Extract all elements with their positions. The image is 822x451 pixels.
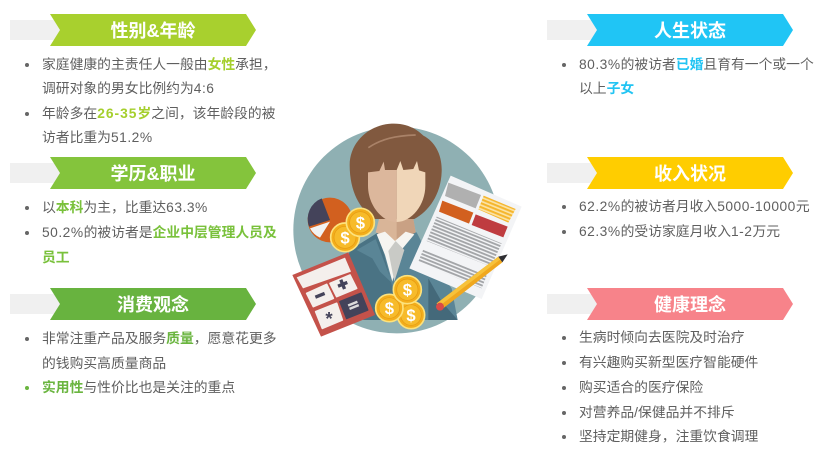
figure: neck and suit bbox=[344, 219, 458, 320]
icon: coins upper: $ bbox=[340, 228, 350, 247]
banner: health concepts: 健康理念 bbox=[654, 295, 726, 315]
banner: consumption attitudes bbox=[10, 288, 256, 320]
bullet text: marriage and children: 以上子女 bbox=[579, 81, 634, 96]
bullet text: responsibility: 家庭健康的主责任人一般由女性承担， bbox=[42, 57, 277, 72]
banner: gender and age: 性别&年龄 bbox=[110, 21, 196, 41]
banner: education and occupation bbox=[10, 157, 256, 189]
background circle bbox=[293, 127, 500, 333]
bullet text: job level: 员工 bbox=[42, 250, 70, 265]
bullet text: quality bbox=[25, 331, 277, 371]
bullet text: marriage and children: 80.3%的被访者已婚且育有一个或一个 bbox=[579, 57, 814, 72]
icon: coins lower: $ bbox=[403, 281, 413, 300]
banner: income status: 收入状况 bbox=[654, 164, 726, 184]
bullet text: fitness: 坚持定期健身，注重饮食调理 bbox=[579, 429, 758, 444]
bullet text: degree: 以本科为主，比重达63.3% bbox=[42, 200, 208, 215]
icon: calculator bbox=[292, 252, 375, 337]
bullet text: age range: 访者比重为51.2% bbox=[42, 130, 153, 145]
panel: gender and age bbox=[10, 14, 277, 145]
panel: education and occupation bbox=[10, 157, 277, 265]
panel: income status bbox=[547, 157, 810, 239]
banner: education and occupation: 学历&职业 bbox=[110, 164, 196, 184]
panel: consumption attitudes bbox=[10, 288, 277, 395]
bullet text: responsibility bbox=[25, 57, 277, 96]
bullet text: job level bbox=[25, 225, 277, 265]
banner: life status: 人生状态 bbox=[654, 21, 726, 41]
figure: hair bbox=[350, 124, 442, 219]
icon: coins lower bbox=[376, 276, 425, 329]
icon: report document bbox=[409, 176, 522, 299]
bullet text: insurance: 购买适合的医疗保险 bbox=[579, 380, 703, 395]
bullet text: age range bbox=[25, 106, 275, 145]
bullet text: quality: 非常注重产品及服务质量，愿意花更多 bbox=[42, 331, 277, 346]
panel: life status bbox=[547, 14, 814, 96]
icon: pencil bbox=[436, 254, 508, 311]
banner: income status bbox=[547, 157, 793, 189]
banner: gender and age bbox=[10, 14, 256, 46]
bullet text: household income: 62.3%的受访家庭月收入1-2万元 bbox=[579, 224, 780, 239]
banner: consumption attitudes: 消费观念 bbox=[117, 295, 189, 315]
bullet text: age range: 年龄多在26-35岁之间，该年龄段的被 bbox=[42, 106, 275, 121]
banner: health concepts bbox=[547, 288, 793, 320]
icon: coins lower: $ bbox=[385, 299, 395, 318]
icon: coins upper bbox=[331, 208, 374, 252]
icon: coins upper: $ bbox=[356, 213, 366, 232]
bullet text: responsibility: 调研对象的男女比例约为4:6 bbox=[42, 81, 214, 96]
figure: face bbox=[368, 161, 425, 222]
illustration: businesswoman with finance icons bbox=[292, 124, 522, 337]
bullet text: personal income: 62.2%的被访者月收入5000-10000元 bbox=[579, 199, 810, 214]
bullet text: marriage and children bbox=[562, 57, 814, 96]
bullet text: supplements: 对营养品/保健品并不排斥 bbox=[579, 405, 735, 420]
icon: calculator: * bbox=[325, 308, 333, 329]
icon: coins lower: $ bbox=[406, 306, 416, 325]
bullet text: job level: 50.2%的被访者是企业中层管理人员及 bbox=[42, 225, 277, 240]
bullet text: practicality: 实用性与性价比也是关注的重点 bbox=[42, 380, 235, 395]
bullet text: smart hardware: 有兴趣购买新型医疗智能硬件 bbox=[579, 355, 758, 370]
icon: pie chart bbox=[308, 198, 352, 242]
panel: health concepts bbox=[547, 288, 793, 444]
bullet text: quality: 的钱购买高质量商品 bbox=[42, 356, 166, 371]
bullet text: hospital: 生病时倾向去医院及时治疗 bbox=[579, 330, 745, 345]
banner: life status bbox=[547, 14, 793, 46]
